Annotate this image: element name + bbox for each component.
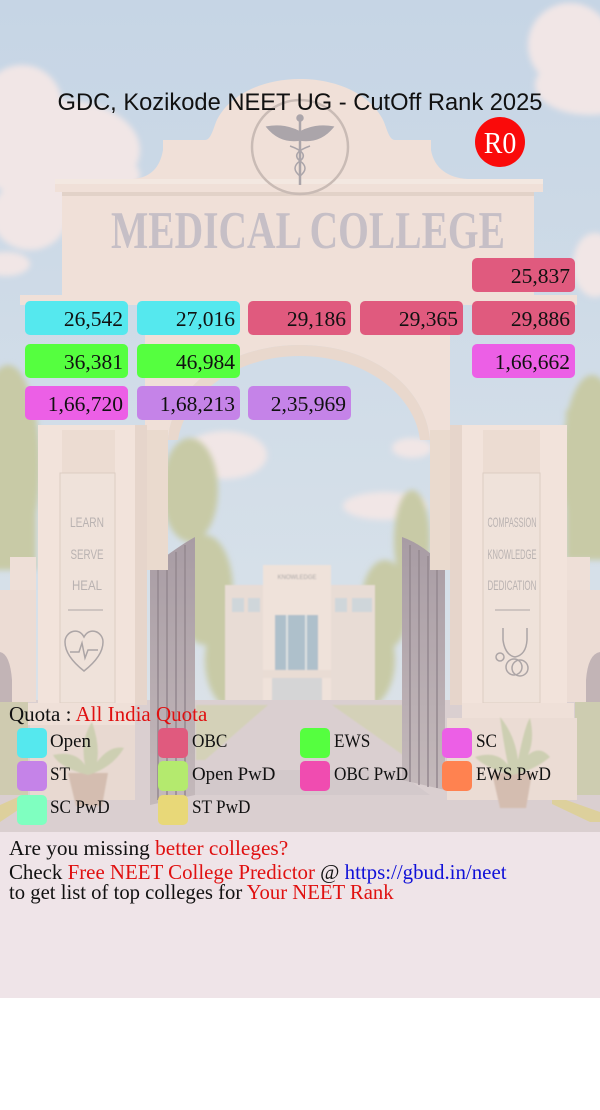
label SC PwD: SC PwD — [50, 797, 110, 818]
right pillar inscription: DEDICATION — [488, 577, 536, 593]
swatch ST PwD — [158, 795, 188, 825]
label SC: SC — [476, 731, 497, 752]
round badge: R0 — [484, 125, 516, 160]
title: GDC, Kozikode NEET UG - CutOff Rank 2025 — [58, 90, 542, 116]
swatch Open — [17, 728, 47, 758]
left pillar inscription: SERVE — [70, 546, 104, 562]
label ST PwD: ST PwD — [192, 797, 250, 818]
icon: heart with pulse — [65, 610, 103, 671]
iron gates — [150, 537, 445, 805]
quota heading: Quota : All India Quota — [9, 702, 207, 726]
gate structure — [20, 79, 577, 800]
swatch EWS — [300, 728, 330, 758]
rank grid — [25, 258, 575, 420]
sky — [0, 0, 600, 832]
rank box ST: 2,35,969 — [271, 392, 346, 416]
rank box OBC: 25,837 — [511, 264, 570, 288]
rank box Open — [25, 301, 128, 335]
rank box OBC: 29,186 — [287, 307, 346, 331]
road shadow band — [175, 770, 430, 795]
label OBC PwD: OBC PwD — [334, 764, 408, 785]
left pillar inscription: HEAL — [72, 577, 102, 593]
rank box OBC — [472, 258, 575, 292]
right pillar inscription — [488, 514, 536, 593]
rank box EWS — [25, 344, 128, 378]
legend — [17, 728, 551, 825]
promo line 2: Check Free NEET College Predictor @ https://gbud.in/neet — [9, 860, 507, 884]
rank box Open: 27,016 — [176, 307, 235, 331]
swatch SC PwD — [17, 795, 47, 825]
label EWS PwD: EWS PwD — [476, 764, 551, 785]
rank box ST — [248, 386, 351, 420]
promo panel — [0, 832, 600, 998]
left pillar inscription: LEARN — [70, 514, 104, 530]
rank box SC — [25, 386, 128, 420]
promo line 3: to get list of top colleges for Your NEET Rank — [9, 882, 394, 904]
swatch SC — [442, 728, 472, 758]
side walls — [0, 557, 600, 702]
rank box ST — [137, 386, 240, 420]
swatch OBC — [158, 728, 188, 758]
label Open: Open — [50, 731, 91, 752]
rank box OBC — [360, 301, 463, 335]
kerb — [552, 795, 600, 822]
rank box OBC — [248, 301, 351, 335]
icon: stethoscope — [495, 610, 530, 676]
rank box ST: 1,68,213 — [160, 392, 235, 416]
rank box SC: 1,66,720 — [48, 392, 123, 416]
label OBC: OBC — [192, 731, 227, 752]
potted plants — [53, 717, 550, 808]
label ST: ST — [50, 764, 70, 785]
rank box OBC: 29,365 — [399, 307, 458, 331]
ground and hedges — [0, 700, 600, 832]
clouds — [0, 3, 600, 520]
building sign text: KNOWLEDGE — [277, 575, 317, 581]
rank box Open: 26,542 — [64, 307, 123, 331]
label Open PwD: Open PwD — [192, 764, 275, 785]
label EWS: EWS — [334, 731, 370, 752]
rank box SC: 1,66,662 — [495, 350, 570, 374]
rank box EWS: 36,381 — [64, 350, 123, 374]
swatch OBC PwD — [300, 761, 330, 791]
main building — [225, 565, 375, 710]
promo line 1: Are you missing better colleges? — [9, 836, 288, 860]
round badge — [475, 117, 525, 167]
rank box EWS: 46,984 — [176, 350, 235, 374]
trees — [0, 365, 600, 710]
crest: caduceus emblem — [252, 100, 348, 194]
right pillar inscription: COMPASSION — [488, 514, 536, 530]
right pillar inscription: KNOWLEDGE — [488, 546, 536, 562]
rank box OBC — [472, 301, 575, 335]
swatch ST — [17, 761, 47, 791]
rank box SC — [472, 344, 575, 378]
swatch Open PwD — [158, 761, 188, 791]
rank box Open — [137, 301, 240, 335]
rank box OBC: 29,886 — [511, 307, 570, 331]
left pillar inscription — [70, 514, 104, 593]
background illustration: medical college gate — [0, 0, 600, 832]
rank box EWS — [137, 344, 240, 378]
swatch EWS PwD — [442, 761, 472, 791]
